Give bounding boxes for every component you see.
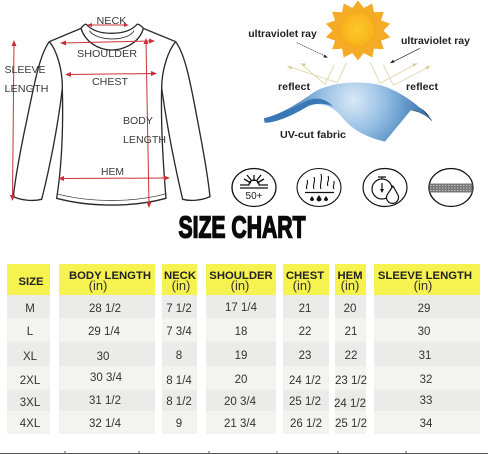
column: CHEST: 26 1/2	[290, 418, 322, 430]
column: SHOULDER: 21 3/4	[224, 418, 257, 430]
column: NECK: NECK	[164, 270, 197, 282]
column: SHOULDER: 20	[235, 374, 247, 386]
column: SIZE: 3XL	[20, 397, 41, 409]
icon: sun	[324, 0, 392, 61]
column: BODY LENGTH	[59, 264, 155, 434]
column: HEM: HEM	[337, 270, 363, 282]
fabric labels	[248, 29, 470, 141]
column: SLEEVE LENGTH: (in)	[414, 278, 432, 293]
icon: UPF 50+: 50+	[246, 191, 263, 202]
column: SHOULDER: (in)	[231, 278, 249, 293]
column: SLEEVE LENGTH: 29	[418, 303, 430, 315]
column: BODY LENGTH: 32 1/4	[89, 418, 122, 430]
column: SIZE: 4XL	[20, 418, 41, 430]
icon: quick dry stopwatch	[363, 168, 407, 206]
icon: fabric weave	[429, 168, 473, 206]
icon: moisture wicking	[297, 168, 341, 206]
column: CHEST: 22	[299, 326, 311, 338]
column: BODY LENGTH: 29 1/4	[88, 326, 121, 338]
column: SLEEVE LENGTH: SLEEVE LENGTH	[378, 270, 472, 282]
column: CHEST: 23	[299, 350, 311, 362]
diagram: UV-cut fabric reflecting sun rays	[248, 0, 470, 142]
fabric labels: reflect	[278, 82, 311, 93]
fabric labels: UV-cut fabric	[280, 130, 346, 141]
column: BODY LENGTH: 28 1/2	[89, 303, 121, 315]
diagram: shirt with measurement lines	[4, 15, 210, 208]
shirt labels: NECK	[96, 15, 126, 27]
column: SLEEVE LENGTH: 34	[420, 418, 433, 430]
icon: UPF 50+	[232, 168, 276, 206]
shirt labels: BODY	[123, 115, 153, 127]
column: SHOULDER: 19	[235, 350, 247, 362]
column: NECK: 8 1/2	[166, 396, 192, 408]
column: HEM: (in)	[341, 278, 359, 293]
column: SIZE	[7, 264, 50, 434]
shirt labels: HEM	[101, 166, 124, 178]
column: BODY LENGTH: 31 1/2	[89, 395, 121, 407]
column: HEM: 24 1/2	[334, 398, 366, 410]
column: NECK: 9	[176, 418, 182, 430]
column: BODY LENGTH: (in)	[89, 278, 107, 293]
column: SLEEVE LENGTH: 33	[420, 395, 432, 407]
column: HEM: 23 1/2	[335, 375, 367, 387]
measurement arrows	[10, 23, 170, 208]
column: CHEST: (in)	[293, 278, 311, 293]
column: BODY LENGTH: 30 3/4	[90, 372, 123, 384]
column: SIZE: M	[25, 303, 35, 315]
column: BODY LENGTH: BODY LENGTH	[69, 270, 151, 282]
column: NECK: 8	[176, 350, 182, 362]
column: CHEST: 24 1/2	[289, 375, 321, 387]
column: CHEST: 25 1/2	[289, 396, 321, 408]
reflected rays	[287, 62, 431, 85]
column: SLEEVE LENGTH: 31	[419, 350, 431, 362]
column: SLEEVE LENGTH: 32	[420, 374, 432, 386]
column: BODY LENGTH: 30	[97, 351, 109, 363]
icon: fabric sheet	[264, 82, 432, 142]
column: HEM: 25 1/2	[335, 418, 367, 430]
column: NECK: 7 1/2	[166, 303, 192, 315]
column: NECK	[162, 264, 197, 434]
column: SLEEVE LENGTH	[374, 264, 480, 434]
size table	[7, 264, 480, 434]
column: NECK: (in)	[172, 278, 190, 293]
column: HEM	[334, 264, 367, 434]
icon row	[232, 168, 473, 206]
column: NECK: 7 3/4	[166, 326, 192, 338]
column: SHOULDER: 20 3/4	[224, 396, 257, 408]
column: SHOULDER: SHOULDER	[209, 270, 273, 282]
shirt labels: CHEST	[92, 76, 129, 88]
column: SIZE: SIZE	[18, 276, 44, 288]
column: CHEST: CHEST	[286, 270, 324, 282]
fabric labels: ultraviolet ray	[248, 29, 317, 40]
column: SHOULDER	[206, 264, 276, 434]
shirt labels	[4, 15, 166, 178]
column: HEM: 20	[344, 303, 356, 315]
column: CHEST: 21	[299, 303, 311, 315]
fabric labels: reflect	[406, 82, 439, 93]
column: HEM: 22	[345, 350, 357, 362]
title: SIZE CHART	[178, 210, 306, 244]
shirt outline	[13, 24, 210, 205]
column: SLEEVE LENGTH: 30	[418, 326, 430, 338]
fabric labels: ultraviolet ray	[401, 36, 470, 47]
column: SIZE: L	[27, 326, 34, 338]
shirt labels: SHOULDER	[77, 48, 137, 60]
column: SIZE: XL	[23, 351, 38, 363]
shirt labels: LENGTH	[123, 134, 166, 146]
column: HEM: 21	[345, 326, 357, 338]
shirt labels: SLEEVE	[4, 64, 46, 76]
column: SIZE: 2XL	[20, 375, 41, 387]
column: SHOULDER: 17 1/4	[225, 302, 258, 314]
ray pointer arrows	[297, 43, 420, 63]
column: SHOULDER: 18	[235, 326, 247, 338]
column: NECK: 8 1/4	[166, 375, 192, 387]
shirt labels: LENGTH	[4, 83, 48, 95]
column: CHEST	[283, 264, 329, 434]
